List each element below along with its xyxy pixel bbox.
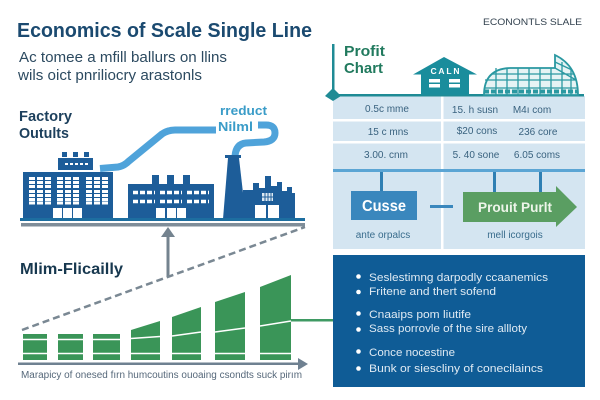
connector lines [333,169,585,192]
bullet text [369,272,549,375]
icon: house: CALN [430,66,460,76]
bullet text: Bunk or siescliny of conecilaincs [369,363,544,375]
table values: M4ı com [513,105,551,116]
heading: lower chart: Mlim-Flicailly [20,261,123,278]
dashed trend line [22,227,305,330]
table values: 5. 40 sone [453,150,500,161]
profit chart axes [325,44,584,101]
bar chart [23,275,291,360]
factory: large building [23,152,113,219]
pipe: chimney flow [235,125,275,156]
table values: 15. h susn [452,105,498,116]
factory: small building [243,176,295,220]
bullet text: Fritene and thert sofend [369,286,496,298]
panel: profit table [333,96,585,249]
bullet text: Seslestimng darpodly ccaanemics [369,272,549,284]
table values [364,104,560,161]
label: product [218,103,268,134]
subtitle: wils oict pnriliocry arastonls [17,67,202,84]
heading: profit chart: Chart [344,60,383,77]
icon: house [413,57,477,95]
subtitle [17,49,227,84]
heading: profit chart: Profit [344,43,385,60]
chart caption: Marapicy of onesed fırn humcoutins ouoaing csondts suck pirım [21,370,302,381]
label: product: rreduct [220,103,268,118]
bullet text: Sass porrovle of the sire allloty [369,323,528,335]
arrow: profit [463,186,577,227]
table values: 0.5c mme [365,104,409,115]
table values: 236 core [519,127,558,138]
title: Economics of Scale Single Line [17,19,312,42]
factory ground line [20,218,305,226]
subtitle: Ac tomee a mfill ballurs on llins [19,49,227,66]
label: product: Nilml [218,119,253,134]
green connector [291,319,334,322]
arrow: up [161,227,175,277]
bullet text: Conce nocestine [369,347,455,359]
factory: medium building [128,175,214,219]
box captions [356,230,543,241]
dash between boxes [430,205,453,208]
chart axis arrow [18,358,308,370]
table values: 3.00. cnm [364,150,408,161]
heading: profit chart [344,43,385,77]
table values: 15 c mns [368,127,408,138]
icon: greenhouse [484,55,578,95]
heading: factory outputs: Outults [19,125,69,142]
table values: 6.05 coms [514,150,560,161]
heading: factory outputs [19,108,73,142]
factory: chimney [223,155,246,219]
bullet text: Cnaaips pom liutife [369,309,471,321]
top right label: ECONONTLS SLALE [483,17,582,28]
arrow: profit: Prouit Purlt [478,200,553,215]
panel: notes [333,255,585,387]
box: cusse: Cusse [362,198,406,215]
pipe: left flow [100,130,216,168]
box captions: ante orpalcs [356,230,410,241]
table values: $20 cons [457,126,497,137]
heading: factory outputs: Factory [19,108,73,125]
box: cusse [351,191,417,220]
bullet dots [356,274,361,371]
box captions: mell icorgois [487,230,543,241]
